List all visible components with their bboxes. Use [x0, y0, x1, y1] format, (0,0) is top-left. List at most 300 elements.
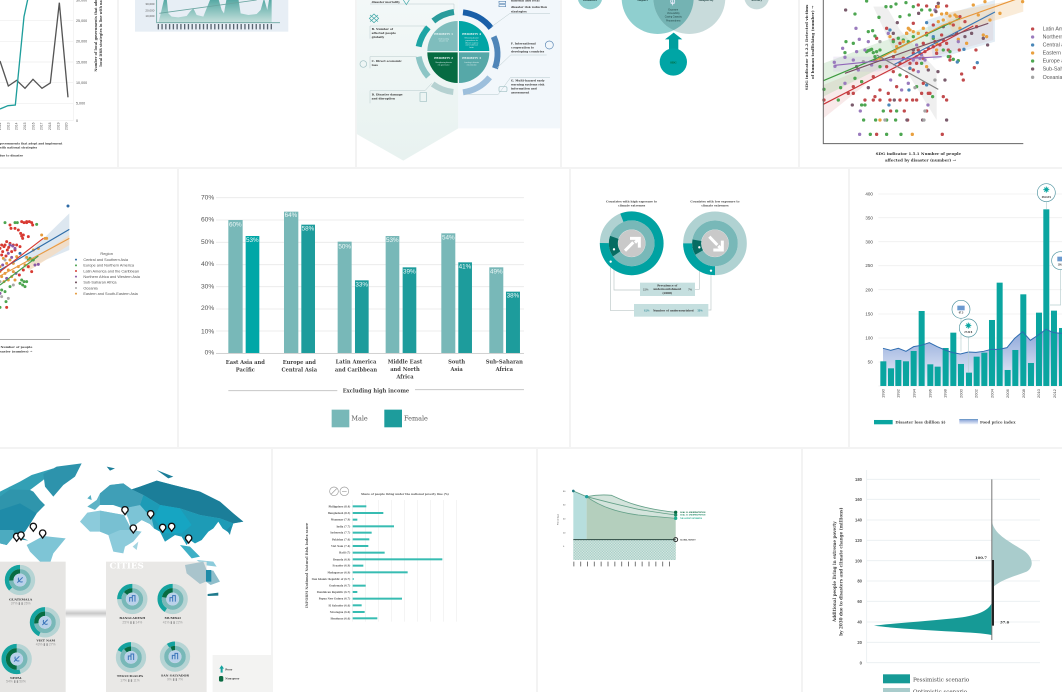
place names: GUATEMALA — [9, 597, 33, 601]
upper projection area — [587, 495, 676, 560]
overlap area — [654, 0, 694, 30]
map: North America — [0, 468, 53, 545]
cities heading: CITIES — [110, 562, 144, 572]
priority quadrants: risk governance — [438, 64, 450, 66]
axis title: national risk index: INFORM National Natural Risk Index score — [305, 522, 309, 608]
bar value labels: 50% — [338, 243, 351, 250]
y axis labels: 60 — [857, 599, 863, 604]
axis and trend line — [157, 0, 280, 23]
priority quadrants — [427, 21, 489, 83]
circle: SDG — [660, 48, 687, 76]
year labels: 1994 — [911, 388, 916, 398]
chart title: Share of people living under the national poverty line (%) — [361, 492, 450, 496]
y axis labels: 150 — [865, 312, 873, 317]
year labels: 2012 — [1052, 388, 1057, 398]
category labels — [226, 360, 523, 381]
hatched baseline area — [573, 540, 676, 560]
donut: Mumbai — [160, 586, 186, 612]
y axis labels: 0 — [860, 660, 863, 665]
callout: food 2011 — [1052, 252, 1062, 270]
legend — [332, 410, 428, 427]
haze band — [66, 608, 106, 618]
bars: South Asia — [441, 233, 472, 353]
donut headings: climate extremes — [618, 204, 646, 208]
right axis labels: 25,000 — [76, 19, 87, 23]
right target labels: strategies — [511, 9, 527, 13]
y axis labels: 160 — [855, 497, 863, 502]
legend: Northern Africa and Western Asia — [83, 275, 141, 279]
y labels — [145, 2, 155, 18]
place names: BANGLADESH — [119, 616, 145, 620]
y axis labels: 100 — [865, 336, 873, 341]
bar value labels: 41% — [459, 263, 472, 270]
country labels: Nicaragua (6.6) — [330, 611, 350, 614]
y axis labels: 10% — [201, 328, 214, 335]
y axis — [556, 491, 566, 548]
y labels: 10,000 — [145, 14, 155, 18]
y axis labels: 140 — [855, 518, 863, 523]
map: Madagascar — [133, 542, 138, 550]
panel: poverty scenarios half violin — [832, 470, 1040, 692]
country labels: Myanmar (7.9) — [331, 519, 350, 522]
donut: Bangladesh — [119, 586, 145, 612]
legend: Food price index — [980, 419, 1016, 424]
country labels: Haiti (7) — [339, 552, 350, 555]
legend: Europe and Northern America — [83, 264, 135, 268]
map: Africa — [80, 511, 142, 553]
place names: SAN SALVADOR — [161, 674, 189, 678]
range bar — [992, 560, 994, 626]
callout: disaster 2011: 364.18 $ — [1042, 196, 1052, 199]
bar value labels — [229, 212, 520, 300]
region legend — [1031, 27, 1062, 81]
percent rows: 37% ▮ ▮ 26% — [11, 602, 31, 606]
box: number undernourished: 39% — [697, 309, 703, 313]
y axis labels: 40% — [201, 261, 214, 268]
panel: projected area chart — [556, 490, 706, 564]
y axis: 0 — [563, 546, 565, 548]
category labels: Latin America — [336, 360, 377, 366]
year labels: 1996 — [927, 388, 932, 398]
right axis labels: 20,000 — [76, 40, 87, 44]
box: number undernourished: 61% — [644, 309, 650, 313]
year labels: 2018 — [48, 122, 52, 130]
donut headings: Countries with low exposure to — [690, 200, 740, 204]
legend: Latin America and the Caribbean — [83, 269, 139, 273]
axis title — [94, 0, 103, 72]
bar value labels: 39% — [403, 268, 416, 275]
panel: right city tile — [106, 562, 207, 692]
y axis labels: 200 — [865, 287, 873, 292]
left target labels: disaster mortality — [372, 0, 400, 4]
y axis title — [804, 4, 815, 90]
legend: Male — [351, 415, 368, 423]
orange band — [23, 235, 69, 270]
percent rows: 41% ▮ ▮ 22% — [163, 620, 183, 624]
food price area — [883, 329, 1062, 386]
donut: Viet Nam — [32, 609, 58, 635]
country labels: Pakistan (7.6) — [332, 538, 350, 541]
y labels: 20,000 — [145, 8, 155, 12]
y axis labels: 400 — [865, 192, 873, 197]
map: Eurasia — [87, 481, 243, 545]
category labels: Middle East — [388, 360, 423, 366]
legend: Sub-Saharan Africa — [83, 281, 117, 285]
bar value labels: 38% — [507, 293, 520, 300]
year labels: 2008 — [1021, 388, 1026, 398]
y axis: 60 — [563, 505, 566, 507]
confidence fan — [23, 213, 69, 265]
projection lines — [573, 491, 676, 518]
year labels: 2004 — [990, 388, 995, 398]
year labels: 2000 — [959, 388, 964, 398]
donut headings — [606, 200, 740, 208]
priority quadrants: PRIORITY 1 — [434, 32, 453, 36]
y axis labels: 40 — [857, 620, 863, 625]
venn text: Coping Capacity — [665, 16, 683, 19]
donut: Nepal — [4, 646, 30, 672]
x axis — [0, 338, 70, 341]
arrow — [665, 33, 682, 52]
circle: impact — [622, 0, 694, 34]
year labels: 1990 — [881, 388, 886, 398]
right target labels: cooperation to — [511, 46, 534, 50]
icon: gender symbol — [671, 0, 675, 5]
y axis: 20 — [563, 532, 566, 534]
priority quadrants: PRIORITY 4 — [462, 32, 481, 36]
country labels: Rwanda (6.9) — [333, 558, 350, 561]
bars: East Asia and Pacific — [228, 220, 259, 353]
year labels: 2019 — [56, 122, 60, 130]
category labels: and Caribbean — [335, 367, 377, 373]
box: number undernourished — [634, 304, 708, 317]
category labels: Africa — [495, 367, 514, 373]
median line — [990, 479, 993, 640]
panel: Sendai priorities diagram — [357, 0, 560, 161]
right target labels: G. Multi-hazard early — [511, 78, 545, 82]
y axis labels — [855, 477, 863, 665]
priority quadrants: and to build back — [465, 44, 478, 47]
place names: MUMBAI — [164, 616, 181, 620]
country labels: Indonesia (7.7) — [330, 532, 350, 535]
ring segments — [419, 12, 497, 92]
box: prevalence: (2008) — [662, 291, 672, 295]
value labels: 37.6 — [1000, 619, 1010, 624]
y axis labels: 50% — [201, 239, 214, 246]
line labels: GOAL 10: UNDERNUTRITION — [680, 514, 706, 517]
legend: Disaster loss (billion $) — [895, 419, 946, 424]
optimistic distribution — [992, 520, 1032, 588]
priority quadrants: Enhancing disaster — [465, 37, 479, 40]
category labels: Pacific — [236, 368, 255, 374]
priority quadrants: Understanding — [438, 37, 449, 40]
right target labels: assessment — [511, 90, 530, 94]
panel: disaster loss and food price chart — [865, 184, 1062, 424]
country labels: Guatemala (6.7) — [329, 585, 350, 588]
year labels: 2017 — [40, 122, 44, 130]
venn text: Exposure — [668, 8, 679, 11]
panel: local DRR strategies line chart — [0, 0, 103, 158]
axes — [823, 0, 1023, 144]
panel: world map of countries and cities — [0, 463, 273, 692]
country labels — [312, 505, 350, 620]
bar value labels: 49% — [490, 268, 503, 275]
right target labels: warning systems risk — [510, 82, 546, 86]
y axis title: by 2030 due to disasters and climate change (millions) — [838, 508, 843, 636]
priority quadrants: PRIORITY 3 — [462, 56, 481, 60]
callout: disaster 2001: 27.39 $ — [964, 332, 973, 334]
bar value labels: 53% — [246, 237, 259, 244]
bars: Europe and Central Asia — [284, 212, 315, 353]
callout: food 2000: 67.3 — [959, 313, 964, 315]
regression lines — [0, 229, 69, 285]
year labels: 2014 — [15, 122, 19, 130]
category labels: Asia — [450, 367, 463, 373]
lower projection area — [587, 497, 676, 560]
bar value labels: 58% — [302, 226, 315, 233]
y axis: 80 — [563, 491, 566, 493]
legend: Female — [404, 415, 428, 423]
y axis labels: 20 — [857, 640, 863, 645]
confidence bands — [823, 0, 1023, 120]
y axis labels: 50 — [868, 360, 873, 365]
right target labels: developing countries — [511, 50, 545, 54]
legend — [75, 251, 141, 296]
y axis: 40 — [563, 518, 566, 520]
donut: San Salvador — [162, 644, 188, 670]
line labels: GLOBAL TARGET — [680, 538, 696, 541]
place names: TEGUCIGALPA — [117, 674, 144, 678]
chart line: local governments — [0, 0, 28, 109]
bars: Sub-Saharan Africa — [489, 267, 520, 353]
panel: poverty share bar chart — [312, 487, 457, 622]
panel: poor legend — [213, 655, 273, 692]
percent rows: 54% ▮ ▮ 50% — [6, 680, 26, 684]
bar value labels: 53% — [386, 237, 399, 244]
left target labels: C. Direct economic — [372, 59, 402, 63]
place names — [9, 597, 189, 680]
logo marks — [330, 487, 349, 496]
right axis labels: 15,000 — [76, 60, 87, 64]
y axis title: Additional people living in extreme poverty — [832, 521, 837, 623]
scatter dots — [0, 206, 68, 307]
country labels: Bangladesh (8.3) — [328, 512, 350, 515]
category labels: South — [448, 360, 465, 366]
line labels: GOAL 10: UNDERNUTRITION — [680, 511, 706, 514]
country labels: India (7.7) — [336, 525, 350, 528]
target icons — [360, 0, 553, 101]
chart legend: governments that adopt and implement — [0, 142, 63, 146]
food price line — [883, 329, 1062, 354]
category labels: East Asia and — [226, 360, 265, 366]
value labels — [975, 555, 1010, 624]
country labels: Philippines (8.4) — [329, 505, 350, 508]
box: prevalence: Prevalence of — [657, 283, 678, 287]
y axis title — [832, 508, 843, 636]
right axis labels: 5,000 — [76, 102, 85, 106]
y axis labels: 180 — [855, 477, 863, 482]
y axis labels: 250 — [865, 263, 873, 268]
callout connector lines — [961, 202, 1061, 372]
country labels: Ecuador (6.9) — [332, 565, 350, 568]
box: prevalence: 15% — [643, 288, 649, 292]
venn text — [583, 0, 762, 22]
year labels: 2013 — [6, 122, 10, 130]
connector lines — [611, 247, 711, 311]
baseline — [216, 352, 524, 355]
y axis labels: 60% — [201, 217, 214, 224]
year labels: 1998 — [943, 388, 948, 398]
disaster loss bars — [880, 209, 1062, 386]
legend — [874, 419, 1016, 424]
left target labels: globally — [372, 35, 385, 39]
region legend: Oceania — [1043, 75, 1062, 81]
y axis labels: 100 — [855, 558, 863, 563]
callout: disaster 2011 — [1037, 184, 1055, 202]
place names: VIET NAM — [35, 639, 55, 643]
box: prevalence — [640, 283, 695, 296]
bar value labels: 60% — [229, 222, 242, 229]
right axis labels: 10,000 — [76, 81, 87, 85]
priority quadrants: better — [470, 46, 474, 49]
map: South America — [27, 536, 66, 575]
percent rows — [6, 602, 183, 684]
priority quadrants: Investing in disaster — [464, 61, 479, 64]
scatter dots — [824, 1, 1023, 134]
y axis labels: 80 — [857, 579, 863, 584]
country labels: Dominican Republic (6.7) — [317, 591, 350, 594]
callout: disaster 2001 — [959, 319, 977, 337]
y axis title: of human trafficking (number) → — [810, 5, 815, 79]
category labels: Europe and — [283, 360, 316, 366]
bar value labels: 64% — [285, 212, 298, 219]
map pins — [14, 507, 192, 543]
panel: regional scatter plot — [0, 206, 141, 354]
panel: undernourishment donuts — [596, 200, 742, 317]
category labels: Central Asia — [282, 368, 318, 374]
donut: Guatemala — [7, 567, 33, 593]
box: prevalence: 7% — [688, 288, 693, 292]
right target labels: information and — [511, 86, 537, 90]
donut: low exposure countries — [688, 216, 742, 272]
donut: Tegucigalpa — [118, 644, 144, 670]
right axis labels: 0 — [76, 119, 78, 123]
year labels: 2006 — [1005, 388, 1010, 398]
panel: spike area chart — [135, 0, 288, 32]
legend — [883, 674, 970, 692]
priority quadrants: effective response — [465, 41, 478, 44]
place names: NEPAL — [10, 676, 23, 680]
category labels: Africa — [395, 375, 414, 381]
country labels: El Salvador (6.6) — [328, 604, 350, 607]
pale historic area — [573, 491, 587, 560]
left target labels — [372, 0, 403, 100]
priority quadrants: preparedness for — [465, 40, 478, 42]
excluding high income label: Excluding high income — [343, 388, 410, 394]
box: prevalence: undernourishment — [653, 287, 682, 291]
chart markers — [572, 490, 678, 542]
map: Australia over tile — [185, 562, 218, 596]
percent rows: 43% ▮ ▮ 27% — [36, 642, 56, 646]
legend: Region — [100, 251, 113, 256]
country labels: Papua New Guinea (6.7) — [319, 598, 350, 601]
right target labels — [510, 0, 547, 94]
right target labels: disaster risk reduction — [511, 5, 547, 9]
circle: adaptivity — [653, 0, 725, 34]
y axis labels — [201, 194, 214, 356]
bars: Latin America and Caribbean — [338, 242, 369, 353]
chart legend — [0, 142, 63, 158]
year labels — [0, 122, 69, 130]
y axis title: SDG indicator 16.2.2 Detected victims — [804, 4, 809, 90]
y labels: 30,000 — [145, 2, 155, 6]
value labels: 100.7 — [975, 555, 987, 560]
venn text: Preparedness — [666, 19, 681, 22]
priority quadrants: risk reduction — [467, 63, 477, 66]
year labels: 2015 — [23, 122, 27, 130]
map: islands — [87, 467, 232, 567]
panel: poor legend: Poor — [225, 668, 233, 672]
connector lines — [370, 4, 550, 103]
x axis title: affected by disaster (number) → — [885, 157, 957, 162]
right axis labels — [76, 0, 87, 123]
chart legend: due to disaster — [0, 154, 24, 158]
country labels: Madagascar (6.9) — [327, 571, 350, 574]
left target labels: loss — [372, 63, 378, 67]
year labels — [881, 388, 1057, 398]
year labels: 2002 — [974, 388, 979, 398]
circle: hazards — [578, 0, 602, 9]
panel: trafficking scatter plot — [804, 0, 1062, 162]
pessimistic distribution — [874, 603, 992, 635]
y axis labels: 0% — [205, 349, 214, 356]
right target labels: F. International — [511, 42, 536, 46]
legend: Oceania — [83, 286, 98, 290]
y axis labels: 30% — [201, 283, 214, 290]
y axis labels: 120 — [855, 538, 863, 543]
category labels: Sub-Saharan — [486, 360, 523, 366]
panel: poor legend: Non-poor — [225, 676, 240, 680]
country labels: Iran Islamic Republic of (6.7) — [312, 578, 350, 581]
priority quadrants: Strengthening disaster — [435, 61, 452, 64]
left target labels: and disruption — [372, 96, 395, 100]
circle: society — [744, 0, 769, 9]
box: number undernourished: Number of undernourished — [653, 309, 694, 313]
left chevron background — [357, 0, 458, 161]
legend: Pessimistic scenario — [913, 678, 970, 684]
legend: Eastern and South-Eastern Asia — [83, 292, 139, 296]
y axis labels: 70% — [201, 194, 214, 201]
panel: male and female bar chart — [201, 194, 524, 427]
percent rows: 9% ▮ ▮ 7% — [167, 678, 183, 682]
map: Australia east — [206, 570, 220, 585]
donut headings: climate extremes — [701, 204, 729, 208]
chart legend: with national strategies — [0, 146, 37, 150]
left target labels: affected people — [372, 31, 396, 35]
venn text: Vulnerability — [667, 12, 680, 15]
country labels: Viet Nam (7.4) — [330, 545, 350, 548]
donut headings: Countries with high exposure to — [606, 200, 657, 204]
horizontal bars — [353, 505, 442, 619]
left target labels: D. Disaster damage — [372, 92, 403, 96]
year labels: 2010 — [1036, 388, 1041, 398]
bar value labels: 33% — [355, 281, 368, 288]
area series — [158, 0, 272, 23]
x axis title — [876, 151, 962, 162]
year labels: 2020 — [65, 122, 69, 130]
regression lines — [823, 0, 1023, 104]
y axis labels: 20% — [201, 305, 214, 312]
